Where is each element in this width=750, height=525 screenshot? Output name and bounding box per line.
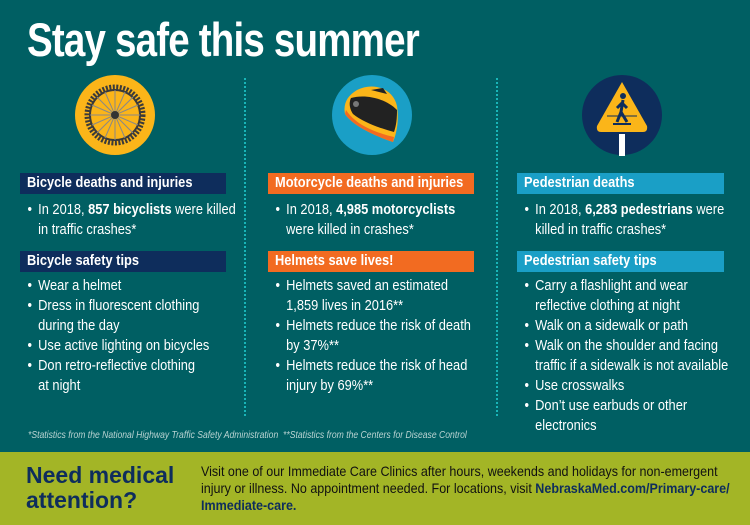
list: pedestrian tips: Don’t use earbuds or other xyxy=(535,398,687,414)
footer banner xyxy=(0,452,750,525)
list: bicycle tips: during the day xyxy=(38,318,119,334)
heading: bicycle deaths: Bicycle deaths and injuries xyxy=(27,175,192,191)
list: pedestrian tips: Walk on a sidewalk or path xyxy=(535,318,688,334)
list: pedestrian tips: Use crosswalks xyxy=(535,378,624,394)
heading: bicycle tips: Bicycle safety tips xyxy=(27,253,139,269)
heading: bicycle deaths xyxy=(20,173,226,194)
footnote: *Statistics from the National Highway Traffic Safety Administration **Statistics from the Centers for Disease Control xyxy=(28,429,467,441)
list: helmet facts: Helmets saved an estimated xyxy=(286,278,448,294)
text: motorcycle stat: In 2018, 4,985 motorcyclists xyxy=(286,202,455,218)
heading: bicycle tips xyxy=(20,251,226,272)
icon: bicycle wheel xyxy=(75,75,155,155)
list: pedestrian tips: traffic if a sidewalk is not available xyxy=(535,358,728,374)
panel: pedestrian xyxy=(517,173,728,434)
list: helmet facts: 1,859 lives in 2016** xyxy=(286,298,403,314)
footer heading: attention? xyxy=(26,487,137,513)
heading: motorcycle deaths: Motorcycle deaths and injuries xyxy=(275,175,463,191)
list: bicycle tips: Use active lighting on bicycles xyxy=(38,338,209,354)
text: motorcycle stat xyxy=(276,202,455,238)
text: bicycle stat: In 2018, 857 bicyclists were killed xyxy=(38,202,236,218)
footer text: Immediate-care. xyxy=(201,497,296,513)
icon: pedestrian sign xyxy=(582,75,662,156)
text: pedestrian stat xyxy=(525,202,724,238)
list: bicycle tips xyxy=(28,278,209,394)
list: bicycle tips: Dress in fluorescent clothing xyxy=(38,298,199,314)
list: pedestrian tips: Walk on the shoulder and facing xyxy=(535,338,718,354)
heading: pedestrian deaths: Pedestrian deaths xyxy=(524,175,635,191)
icon: helmet xyxy=(332,75,412,155)
footer text: Visit one of our Immediate Care Clinics after hours, weekends and holidays for non-emergent xyxy=(201,463,718,479)
text: bicycle stat: in traffic crashes* xyxy=(38,222,136,238)
list: bicycle tips: at night xyxy=(38,378,80,394)
title: Stay safe this summer xyxy=(27,13,419,66)
text: motorcycle stat: were killed in crashes* xyxy=(286,222,414,238)
footer text xyxy=(201,463,730,513)
list: pedestrian tips: Carry a flashlight and wear xyxy=(535,278,688,294)
heading: helmets: Helmets save lives! xyxy=(275,253,393,269)
heading: helmets xyxy=(268,251,474,272)
panel: motorcycle xyxy=(268,173,474,394)
list: pedestrian tips: electronics xyxy=(535,418,597,434)
footer heading xyxy=(26,462,174,513)
list: helmet facts: Helmets reduce the risk of death xyxy=(286,318,471,334)
list: helmet facts xyxy=(276,278,471,394)
list: pedestrian tips xyxy=(525,278,728,434)
panel: bicycle xyxy=(20,173,236,394)
footer text: injury or illness. No appointment needed. For locations, visit NebraskaMed.com/Primary-care/ xyxy=(201,480,730,496)
text: pedestrian stat: killed in traffic crashes* xyxy=(535,222,666,238)
list: bicycle tips: Don retro-reflective clothing xyxy=(38,358,195,374)
heading: pedestrian deaths xyxy=(517,173,724,194)
list: bicycle tips: Wear a helmet xyxy=(38,278,121,294)
heading: pedestrian tips xyxy=(517,251,724,272)
heading: motorcycle deaths xyxy=(268,173,474,194)
list: helmet facts: by 37%** xyxy=(286,338,339,354)
text: pedestrian stat: In 2018, 6,283 pedestrians were xyxy=(535,202,724,218)
list: pedestrian tips: reflective clothing at night xyxy=(535,298,680,314)
heading: pedestrian tips: Pedestrian safety tips xyxy=(524,253,657,269)
list: helmet facts: injury by 69%** xyxy=(286,378,373,394)
text: bicycle stat xyxy=(28,202,236,238)
footer heading: Need medical xyxy=(26,462,174,488)
list: helmet facts: Helmets reduce the risk of head xyxy=(286,358,467,374)
